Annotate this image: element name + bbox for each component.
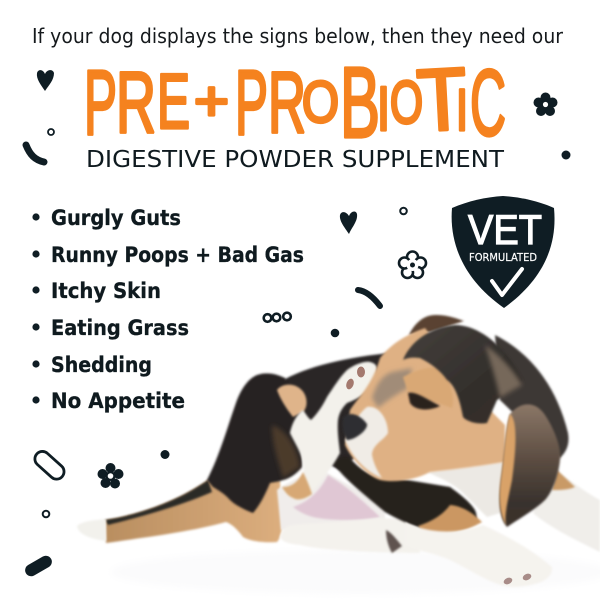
rump and tail xyxy=(105,480,282,543)
icon: curved stroke centre xyxy=(358,290,380,306)
dark chest xyxy=(333,456,477,530)
badge: vet formulated shield: FORMULATED xyxy=(469,252,537,264)
icon: outline flower xyxy=(399,252,426,278)
badge: vet formulated shield xyxy=(452,196,555,308)
title: PRE+PROBIOTIC: T xyxy=(414,49,470,150)
back xyxy=(270,353,400,470)
nose xyxy=(343,414,367,440)
ear rim tan xyxy=(500,414,516,525)
title: PRE+PROBIOTIC xyxy=(84,47,506,159)
title: PRE+PROBIOTIC: E xyxy=(157,57,190,145)
photo: puppy scratching xyxy=(77,315,600,594)
icon: pill outline xyxy=(32,448,67,482)
ear xyxy=(500,404,560,527)
ear flap top xyxy=(409,315,464,335)
belly pink xyxy=(293,475,380,520)
icon: small ring lower xyxy=(43,511,49,517)
item: Itchy Skin: Itchy Skin xyxy=(51,279,161,303)
icon: curved stroke left xyxy=(26,145,44,162)
belly white xyxy=(277,470,385,530)
item: Gurgly Guts: Gurgly Guts xyxy=(51,206,181,230)
brow tan xyxy=(403,368,453,408)
icon: dot centre xyxy=(331,329,339,337)
subtitle: DIGESTIVE POWDER SUPPLEMENT xyxy=(86,147,505,173)
title: PRE+PROBIOTIC: C xyxy=(470,50,506,155)
front leg lying xyxy=(280,518,420,553)
icon: triple rings xyxy=(264,313,291,322)
icon: filled pill xyxy=(23,554,54,578)
icon: dot lower xyxy=(160,450,170,459)
toes shadow xyxy=(386,530,402,553)
raised leg tan xyxy=(282,472,312,499)
floor shadow xyxy=(110,550,600,594)
haunch brown fade xyxy=(272,425,300,478)
title: PRE+PROBIOTIC: B xyxy=(340,47,380,159)
icon: small ring left xyxy=(48,129,54,135)
title: PRE+PROBIOTIC: O xyxy=(302,70,339,135)
symptom list xyxy=(32,206,304,413)
icon: heart centre xyxy=(340,212,357,234)
toes xyxy=(503,572,532,586)
paw pads xyxy=(345,366,365,390)
neck white xyxy=(427,462,515,517)
title: PRE+PROBIOTIC: O xyxy=(390,69,423,136)
rear right leg xyxy=(533,470,600,552)
title: PRE+PROBIOTIC: I xyxy=(377,75,390,144)
head dark top xyxy=(403,325,523,423)
icon: heart top left xyxy=(37,70,54,91)
item: Eating Grass: Eating Grass xyxy=(51,316,189,340)
title: PRE+PROBIOTIC: + xyxy=(194,69,229,132)
item: No Appetite: No Appetite xyxy=(51,389,185,413)
haunch tan patch xyxy=(277,385,307,417)
eye xyxy=(408,393,440,409)
near front leg xyxy=(405,522,552,587)
title: PRE+PROBIOTIC: I xyxy=(456,78,468,143)
white muzzle xyxy=(345,407,388,478)
tail tip xyxy=(77,519,106,541)
title: PRE+PROBIOTIC: P xyxy=(84,52,117,154)
icon: ring centre xyxy=(400,208,407,214)
badge: vet formulated shield: VET xyxy=(468,206,542,253)
icon: black flower lower left xyxy=(98,463,124,488)
icon: dot right xyxy=(562,150,570,160)
tan chest xyxy=(418,505,482,538)
forehead grey xyxy=(372,368,412,408)
title: PRE+PROBIOTIC: R xyxy=(116,55,156,151)
raised hind leg xyxy=(282,362,377,499)
item: Runny Poops + Bad Gas: Runny Poops + Bad Gas xyxy=(51,243,304,267)
icon: black flower right xyxy=(534,92,558,116)
title: PRE+PROBIOTIC: R xyxy=(268,55,306,151)
back of head dark xyxy=(495,335,569,458)
item: Shedding: Shedding xyxy=(51,353,152,377)
intro line: If your dog displays the signs below, then they need our xyxy=(32,24,564,48)
face tan xyxy=(345,328,505,481)
tail black top xyxy=(105,480,212,525)
haunch black xyxy=(207,373,302,513)
title: PRE+PROBIOTIC: P xyxy=(235,52,268,154)
head highlight xyxy=(485,345,522,398)
